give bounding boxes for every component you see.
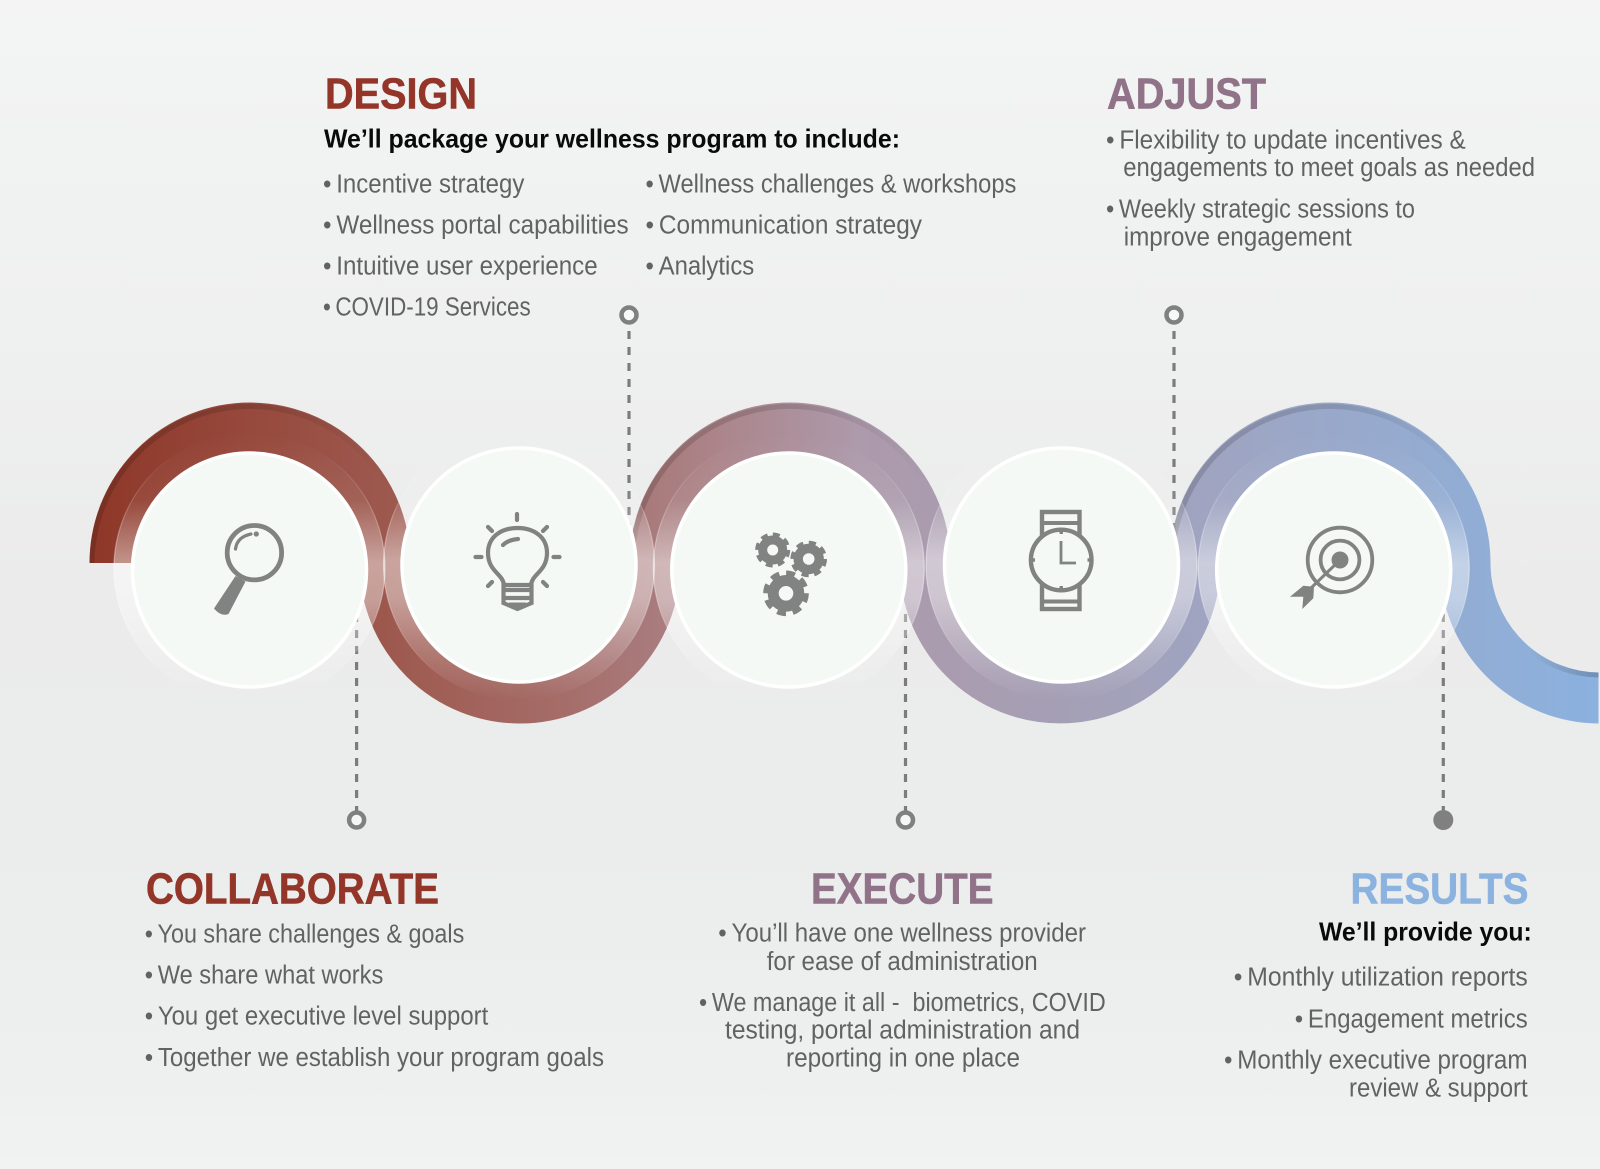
list: adjust items: • Flexibility to update incentives & bbox=[1106, 126, 1466, 154]
heading: execute: EXECUTE bbox=[811, 866, 994, 914]
list: collaborate items: • You get executive level support bbox=[145, 1003, 488, 1031]
list: design items: • Intuitive user experience bbox=[323, 252, 598, 280]
list: adjust items: improve engagement bbox=[1124, 223, 1352, 251]
list: results items: review & support bbox=[1349, 1075, 1528, 1103]
list: collaborate items: • Together we establish your program goals bbox=[145, 1044, 604, 1072]
list: design items: • Incentive strategy bbox=[323, 170, 525, 198]
icon: gears bbox=[757, 534, 825, 614]
step circle: adjust watch bbox=[926, 430, 1197, 700]
step circle: design bulb bbox=[384, 430, 654, 700]
step circle: collaborate bbox=[114, 432, 385, 704]
list: execute items: • You’ll have one wellness provider bbox=[718, 920, 1086, 948]
panel: results bbox=[1224, 866, 1532, 1103]
icon: target with arrow bbox=[1290, 528, 1372, 609]
heading: results: RESULTS bbox=[1350, 866, 1528, 914]
list: design items bbox=[323, 170, 1016, 321]
list: results items: • Monthly executive program bbox=[1224, 1047, 1528, 1075]
connector: execute bbox=[898, 614, 913, 828]
list: collaborate items: • You share challenges & goals bbox=[145, 921, 464, 949]
list: execute items: reporting in one place bbox=[786, 1045, 1020, 1073]
list: design items: • Analytics bbox=[646, 252, 754, 280]
connector: design bbox=[622, 308, 636, 530]
list: design items: • Wellness challenges & workshops bbox=[646, 170, 1016, 198]
step circle: execute gears bbox=[653, 432, 924, 704]
heading: collaborate: COLLABORATE bbox=[146, 866, 439, 914]
list: results items: • Monthly utilization reports bbox=[1234, 964, 1528, 992]
subheading: design: We’ll package your wellness program to include: bbox=[324, 123, 900, 153]
icon: wristwatch bbox=[1031, 512, 1092, 609]
connector: collaborate bbox=[349, 614, 364, 828]
icon: magnifying glass bbox=[214, 526, 282, 615]
list: design items: • Communication strategy bbox=[646, 211, 922, 239]
list: design items: • Wellness portal capabilities bbox=[323, 211, 629, 239]
list: results items: • Engagement metrics bbox=[1295, 1005, 1528, 1033]
list: execute items: • We manage it all - biometrics, COVID bbox=[699, 989, 1106, 1017]
subheading: results: We’ll provide you: bbox=[1319, 917, 1532, 947]
list: adjust items: • Weekly strategic sessions to bbox=[1106, 195, 1415, 223]
step circle: results target bbox=[1198, 432, 1469, 704]
list: execute items bbox=[699, 920, 1106, 1073]
list: execute items: for ease of administration bbox=[767, 948, 1038, 976]
connector: adjust bbox=[1166, 308, 1182, 530]
panel: collaborate bbox=[145, 866, 604, 1072]
icon: light bulb bbox=[476, 514, 560, 609]
panel: adjust bbox=[1106, 71, 1535, 251]
list: collaborate items bbox=[145, 921, 604, 1072]
list: results items bbox=[1224, 964, 1528, 1103]
list: design items: • COVID-19 Services bbox=[323, 293, 531, 321]
connector: results bbox=[1433, 614, 1453, 830]
panel: design bbox=[323, 71, 1016, 321]
list: collaborate items: • We share what works bbox=[145, 961, 383, 989]
heading: design: DESIGN bbox=[325, 71, 477, 119]
panel: execute bbox=[699, 866, 1106, 1073]
list: execute items: testing, portal administration and bbox=[725, 1017, 1080, 1045]
wave ribbon bbox=[92, 406, 1600, 698]
list: adjust items: engagements to meet goals as needed bbox=[1123, 154, 1535, 182]
heading: adjust: ADJUST bbox=[1107, 71, 1266, 119]
list: adjust items bbox=[1106, 126, 1535, 251]
